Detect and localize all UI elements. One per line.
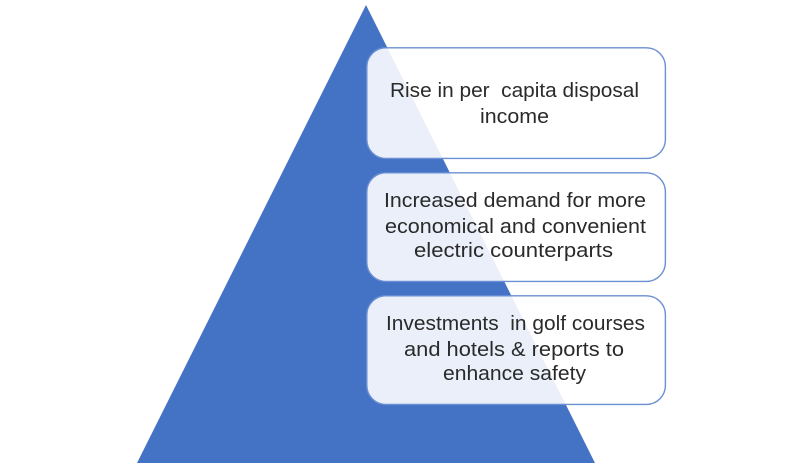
callout text: disposable income xyxy=(390,80,639,128)
callout text: investments: and hotels & reports to xyxy=(404,339,624,361)
callout: investments xyxy=(367,296,665,404)
callout text: investments xyxy=(386,313,645,385)
pyramid triangle xyxy=(137,5,595,463)
callout: disposable income xyxy=(367,48,665,158)
callout: electric demand xyxy=(367,173,665,281)
callout text: electric demand: electric counterparts xyxy=(414,240,613,262)
callout text: disposable income: income xyxy=(480,106,549,128)
callout text: electric demand xyxy=(384,190,646,262)
callout text: electric demand: Increased demand for more xyxy=(384,190,646,212)
callout text: electric demand: economical and convenient xyxy=(385,216,646,238)
callout text: investments: Investments in golf courses xyxy=(386,313,645,335)
callout text: disposable income: Rise in per capita disposal xyxy=(390,80,639,102)
callout text: investments: enhance safety xyxy=(443,363,586,385)
